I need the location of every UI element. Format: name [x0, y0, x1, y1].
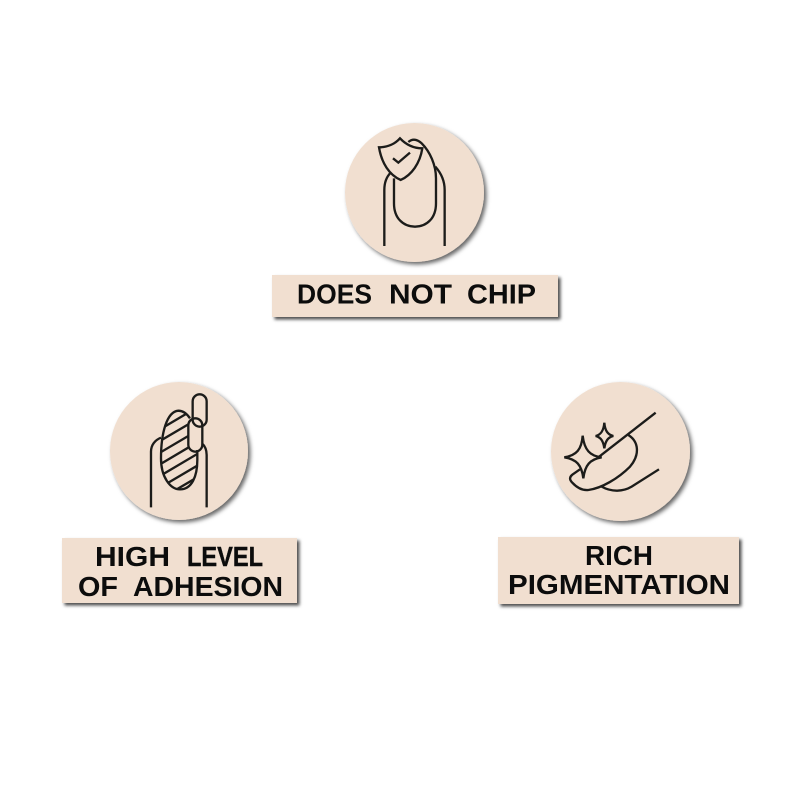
- panel: high level of adhesion: [62, 382, 297, 603]
- icon: striped nail with brush: [110, 382, 248, 520]
- label: high level of adhesion: [62, 538, 297, 603]
- label: does not chip: NOT: [389, 278, 452, 310]
- label: high level of adhesion: LEVEL: [187, 541, 263, 572]
- label: does not chip: DOES: [297, 278, 372, 310]
- label: does not chip: [272, 275, 558, 317]
- icon: nail with shield: [345, 123, 484, 262]
- label: rich pigmentation: PIGMENTATION: [508, 569, 730, 600]
- label: high level of adhesion: ADHESION: [133, 571, 283, 602]
- label: high level of adhesion: OF: [78, 571, 118, 602]
- label: high level of adhesion: HIGH: [95, 541, 170, 572]
- panel: does not chip: [272, 123, 558, 317]
- label: does not chip: CHIP: [467, 278, 536, 310]
- label: rich pigmentation: RICH: [585, 540, 653, 571]
- icon: nail with sparkles: [551, 382, 690, 521]
- panel: rich pigmentation: [498, 382, 739, 604]
- label: rich pigmentation: [498, 537, 739, 604]
